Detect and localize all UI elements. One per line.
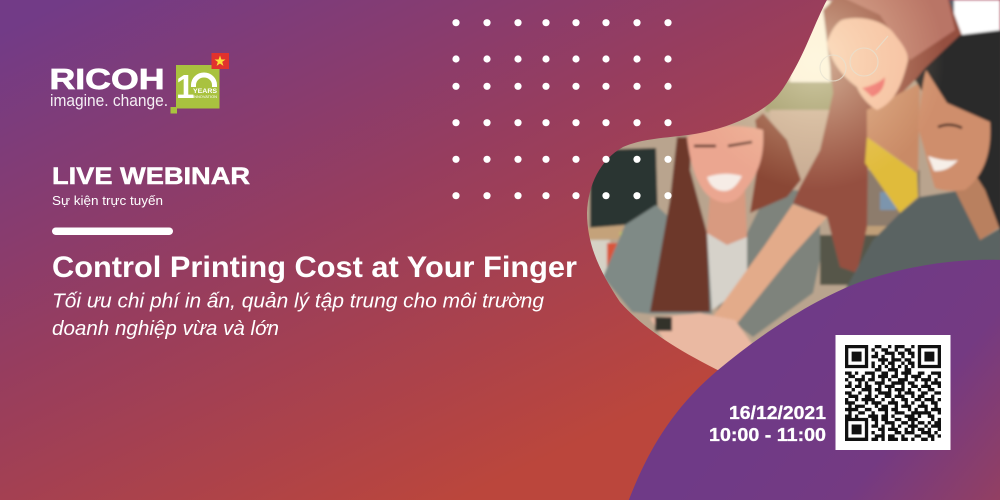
heading: live webinar: LIVE WEBINAR — [52, 163, 250, 190]
event date and time — [709, 403, 826, 445]
left woman's hair, left strand — [650, 137, 710, 312]
divider bar — [52, 228, 173, 235]
middle woman's hair — [793, 0, 962, 273]
title: Control Printing Cost at Your Finger — [52, 251, 577, 284]
left woman's blazer, left side — [603, 205, 712, 314]
left woman's blazer, right side — [717, 190, 820, 337]
middle woman's neck and chest — [867, 83, 920, 173]
tagline: imagine. change. — [50, 91, 168, 110]
anniversary badge: YEARS — [193, 88, 218, 95]
office background — [587, 0, 1000, 344]
right woman's hair — [915, 30, 1000, 235]
logo: Ricoh 10 years — [50, 53, 229, 114]
wordmark: RICOH — [50, 64, 164, 96]
icon: Vietnam flag — [212, 53, 229, 69]
glasses — [820, 36, 888, 81]
right woman's shirt — [845, 190, 1000, 295]
right woman's neck — [954, 178, 1000, 240]
description — [52, 290, 544, 340]
event date and time: 10:00 - 11:00 — [709, 425, 826, 445]
description: doanh nghiệp vừa và lớn — [52, 318, 279, 340]
anniversary badge: 1 — [176, 68, 194, 105]
left woman's face — [687, 126, 763, 203]
photo: three women smiling at a laptop — [580, 0, 1000, 380]
anniversary badge — [170, 65, 220, 114]
yellow top — [865, 137, 918, 213]
event date and time: 16/12/2021 — [729, 403, 826, 423]
anniversary badge: INNOVATION — [193, 95, 218, 99]
QR code — [836, 335, 950, 450]
left woman's shirt — [707, 233, 747, 310]
left woman's hair, right strand — [750, 113, 801, 213]
subheading: Sự kiện trực tuyến — [52, 194, 163, 208]
dot grid — [452, 19, 672, 199]
hands — [650, 311, 752, 370]
purple blob with event details — [628, 260, 1000, 500]
monitor — [590, 148, 658, 228]
description: Tối ưu chi phí in ấn, quản lý tập trung cho môi trường — [52, 290, 544, 312]
left woman's neck — [707, 190, 747, 245]
arm — [712, 204, 827, 326]
middle woman's face — [827, 18, 908, 110]
right woman's face — [918, 70, 990, 191]
